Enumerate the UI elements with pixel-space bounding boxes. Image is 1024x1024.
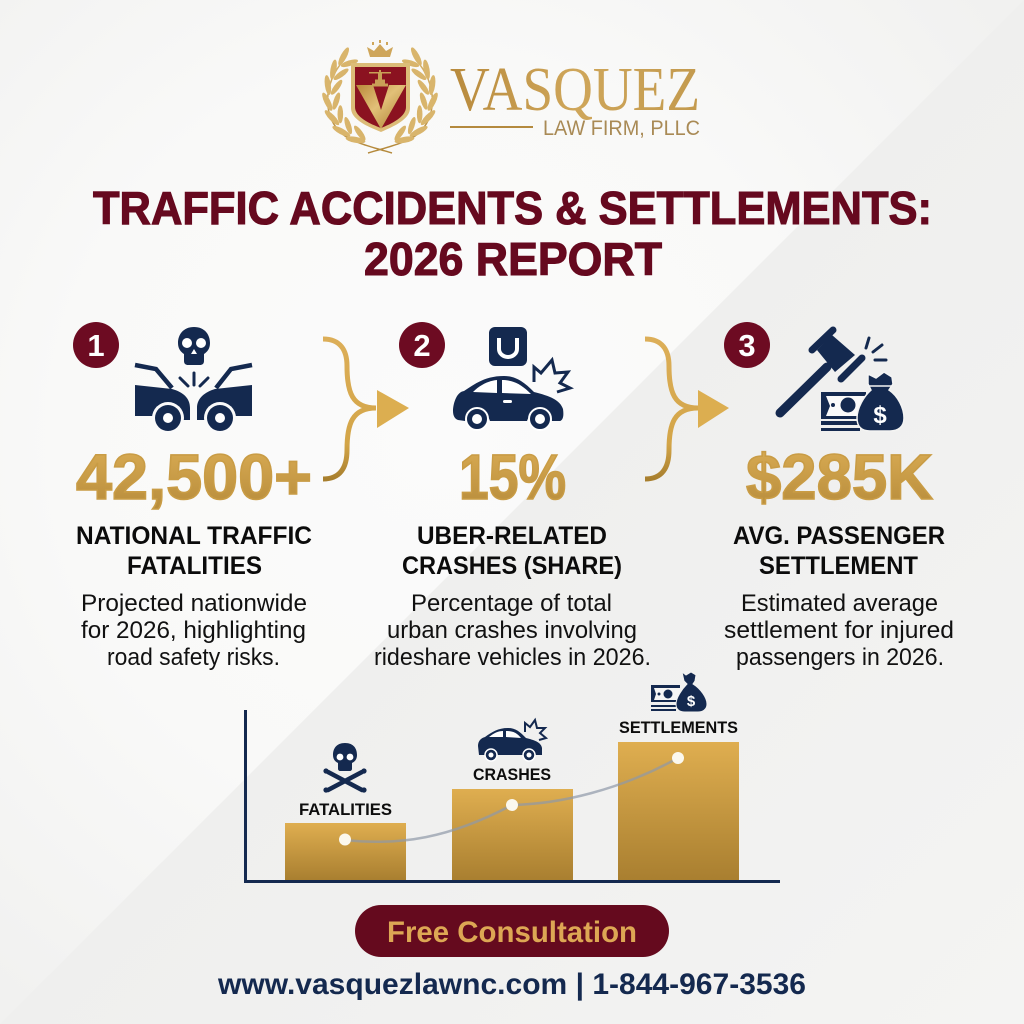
step badge 3: 3: [738, 328, 756, 363]
arrow 2: [645, 339, 729, 479]
heading: FATALITIES: [127, 552, 262, 580]
bar chart: [246, 672, 780, 882]
step badge 3: [724, 322, 770, 368]
chart labels: SETTLEMENTS: [619, 718, 738, 737]
trend line: [345, 758, 678, 842]
heading: SETTLEMENT: [759, 552, 918, 580]
step badge 1: 1: [87, 328, 105, 363]
icon: laurel wreath: [319, 45, 441, 153]
icon: skull and crossbones: [323, 743, 367, 793]
statistic: $285K: [746, 441, 933, 513]
heading: CRASHES (SHARE): [402, 552, 622, 580]
contact line: www.vasquezlawnc.com | 1-844-967-3536: [217, 968, 806, 1001]
description: road safety risks.: [107, 644, 280, 671]
icon: crown: [367, 40, 393, 57]
description: [724, 590, 954, 671]
step badge 2: 2: [413, 328, 431, 363]
icon: small cash and money bag: [651, 672, 707, 712]
title: 2026 REPORT: [364, 233, 662, 285]
icon: rideshare badge and car crash: [453, 327, 570, 430]
bar: crashes: [452, 789, 573, 880]
heading: [76, 522, 312, 580]
description: urban crashes involving: [387, 617, 637, 644]
heading: [402, 522, 622, 580]
description: [81, 590, 307, 671]
logo: [319, 40, 700, 153]
description: Percentage of total: [411, 590, 612, 617]
description: rideshare vehicles in 2026.: [374, 644, 651, 671]
tagline: LAW FIRM, PLLC: [543, 117, 700, 140]
heading: AVG. PASSENGER: [733, 522, 945, 550]
description: settlement for injured: [724, 617, 954, 644]
panel: uber related crashes: [374, 322, 651, 671]
icon: skull over crashed cars: [135, 327, 252, 434]
step badge 2: [399, 322, 445, 368]
chart labels: FATALITIES: [299, 800, 392, 819]
icon: gavel and money bag: $: [873, 402, 887, 429]
description: for 2026, highlighting: [81, 617, 306, 644]
wordmark: VASQUEZ: [450, 56, 700, 124]
heading: UBER-RELATED: [417, 522, 607, 550]
statistic: 15%: [459, 441, 566, 513]
description: Estimated average: [741, 590, 938, 617]
panel: average passenger settlement: [724, 322, 954, 671]
bar: settlements: [618, 742, 739, 880]
statistic: 42,500+: [76, 441, 312, 513]
arrow 1: [323, 339, 409, 479]
description: [374, 590, 651, 671]
panel: national traffic fatalities: [73, 322, 312, 671]
chart labels: CRASHES: [473, 765, 551, 784]
call to action button: Free Consultation: [387, 916, 637, 949]
icon: gavel and money bag: [780, 330, 904, 431]
step badge 1: [73, 322, 119, 368]
icon: shield: [351, 63, 410, 132]
call to action button: [355, 905, 669, 957]
icon: small cash and money bag: $: [687, 693, 696, 710]
axes: [246, 710, 780, 882]
tagline rule: [450, 126, 533, 128]
title: [93, 182, 932, 285]
description: Projected nationwide: [81, 590, 307, 617]
title: TRAFFIC ACCIDENTS & SETTLEMENTS:: [93, 182, 932, 234]
description: passengers in 2026.: [736, 644, 944, 671]
bar: fatalities: [285, 823, 406, 880]
heading: [733, 522, 945, 580]
heading: NATIONAL TRAFFIC: [76, 522, 312, 550]
chart labels: [299, 718, 738, 819]
icon: small car crash: [478, 720, 546, 761]
data points: [339, 752, 684, 846]
